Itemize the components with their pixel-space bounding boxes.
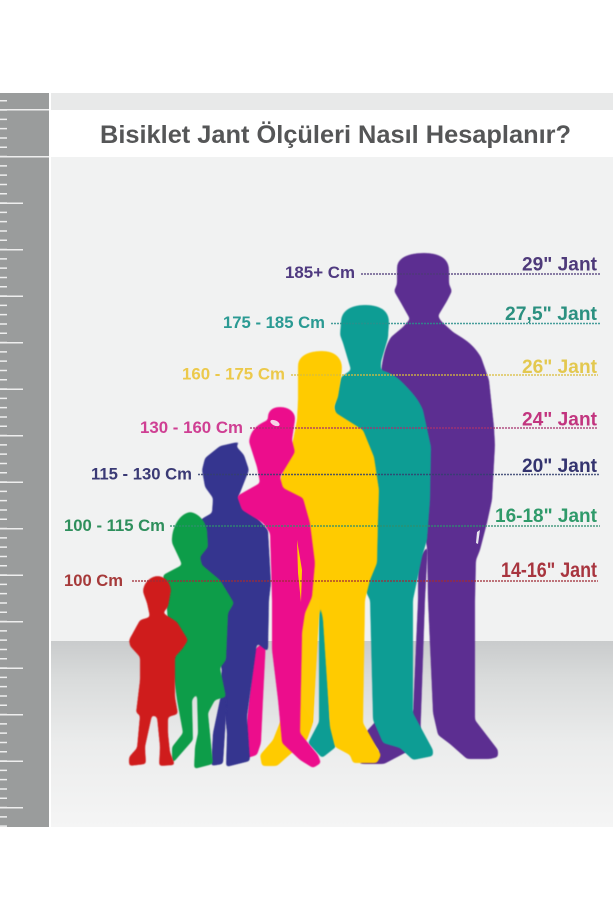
- height label: 185+ cm: 185+ Cm: [285, 264, 355, 282]
- figure: navy back leg: [211, 690, 227, 766]
- figure: red child 100 cm: [129, 576, 188, 766]
- wheel label: 16-18 inch: 16-18" Jant: [495, 505, 597, 527]
- silhouettes: six figures and child: [129, 253, 498, 769]
- measurement line: 27.5 inch: [331, 322, 600, 324]
- height ruler: [0, 93, 49, 827]
- measurement line: 24 inch: [250, 427, 598, 429]
- yellow figure arm gap highlight: [297, 540, 302, 602]
- figure: purple adult 185+ cm: [381, 253, 498, 759]
- measurement line: 14-16 inch: [132, 580, 598, 582]
- measurement line: 26 inch: [291, 374, 598, 376]
- figure: teal back leg: [308, 590, 336, 758]
- height label: 175-185 cm: 175 - 185 Cm: [223, 313, 325, 332]
- height label: 160-175 cm: 160 - 175 Cm: [182, 364, 285, 384]
- figure: navy older boy 115-130 cm: [190, 441, 271, 767]
- wheel label: 26 inch: 26" Jant: [522, 356, 597, 378]
- measurement line: 29 inch: [361, 273, 600, 275]
- height label: 100-115 cm: 100 - 115 Cm: [64, 516, 165, 535]
- measurement line: 20 inch: [198, 474, 600, 476]
- purple figure hand gap: [476, 530, 480, 544]
- measurement line: 16-18 inch: [170, 525, 600, 527]
- figure: yellow back leg: [300, 590, 320, 723]
- figure: purple back leg: [356, 545, 428, 764]
- wheel label: 24 inch: 24" Jant: [522, 408, 597, 430]
- height label: 115-130 cm: 115 - 130 Cm: [91, 464, 192, 484]
- wheel label: 20 inch: 20" Jant: [522, 455, 597, 477]
- wheel label: 29 inch: 29" Jant: [522, 254, 597, 276]
- wheel label: 27.5 inch: 27,5" Jant: [505, 303, 597, 325]
- figure: green boy 100-115 cm: [163, 512, 234, 769]
- title: Bisiklet Jant Ölçüleri Nasıl Hesaplanır?: [100, 120, 571, 149]
- title band: [50, 110, 613, 157]
- figure: pink back leg: [225, 640, 266, 765]
- hair highlight on pink figure: [269, 419, 281, 427]
- height label: 130-160 cm: 130 - 160 Cm: [140, 418, 243, 437]
- wheel label: 14-16 inch: 14-16" Jant: [501, 559, 597, 582]
- figure: teal adult 175-185 cm: [334, 305, 433, 760]
- figure: pink girl 130-160 cm: [237, 407, 321, 768]
- height label: 100 cm: 100 Cm: [64, 571, 123, 590]
- figure: yellow adult 160-175 cm: [260, 351, 381, 766]
